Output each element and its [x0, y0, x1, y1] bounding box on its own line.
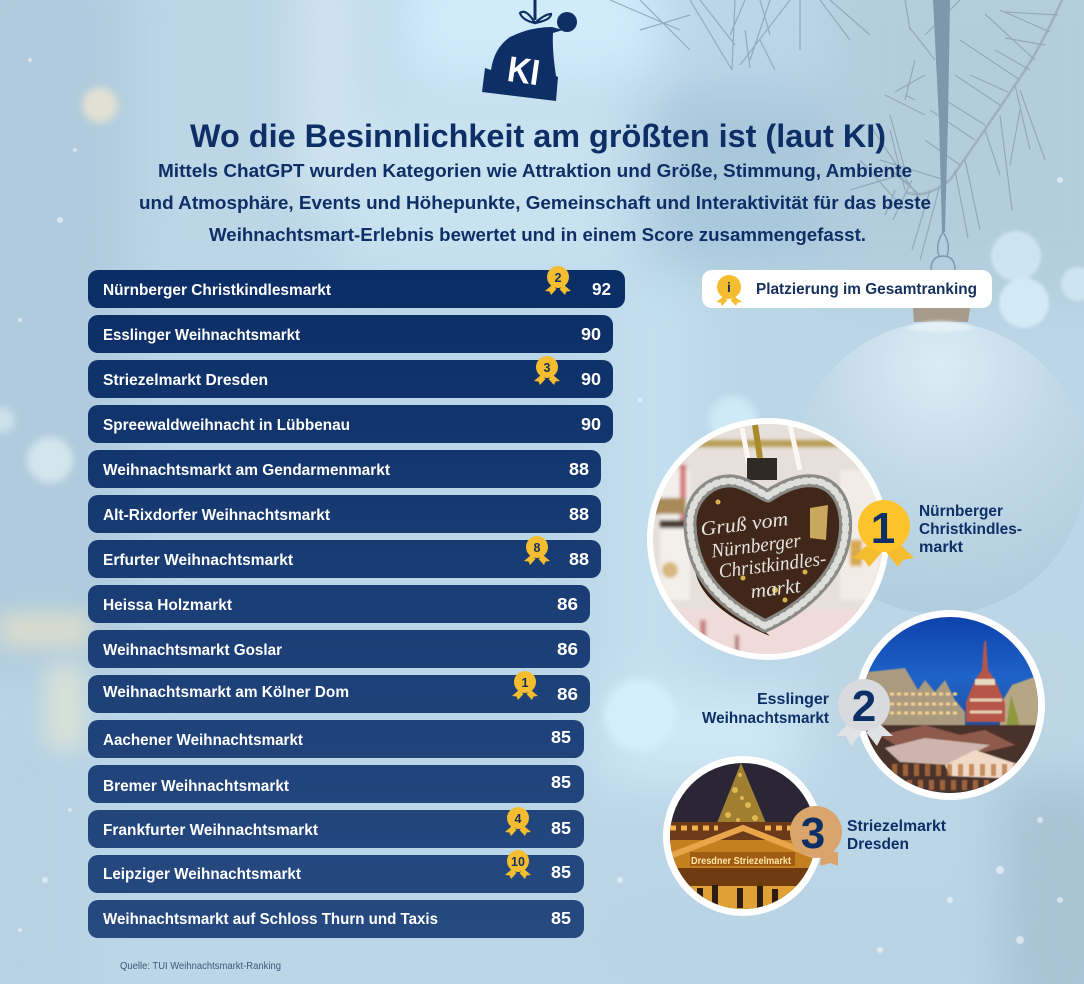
intro text: Weihnachtsmart-Erlebnis bewertet und in einem Score zusammengefasst.: [209, 225, 866, 245]
medal: overall rank 4: 4: [515, 812, 522, 826]
label: Nürnberger Christkindlesmarkt: markt: [919, 539, 964, 556]
label: Esslinger Weihnachtsmarkt: [702, 691, 830, 727]
bar: Weihnachtsmarkt Goslar 86: 86: [557, 639, 578, 659]
bar: Striezelmarkt Dresden 90: 90: [581, 369, 601, 389]
bar: Leipziger Weihnachtsmarkt 85: 85: [551, 862, 571, 882]
medal: overall rank 1: 1: [522, 676, 529, 690]
title: Wo die Besinnlichkeit am größten ist (laut KI): [190, 118, 886, 154]
bar: Weihnachtsmarkt am Gendarmenmarkt 88: Weihnachtsmarkt am Gendarmenmarkt: [103, 462, 391, 479]
medal: rank 2: 2: [852, 682, 876, 731]
bar: Weihnachtsmarkt am Kölner Dom 86: 86: [557, 684, 578, 704]
heart inscription: [702, 516, 826, 598]
bauble: [794, 308, 1084, 614]
icicle and ornament hook: [931, 0, 955, 270]
photo: Dresden Striezelmarkt: [663, 756, 824, 920]
bar: Alt-Rixdorfer Weihnachtsmarkt 88: [88, 495, 601, 533]
heart inscription: Gruß vom: [699, 508, 789, 541]
bar: Heissa Holzmarkt 86: [88, 585, 590, 623]
bar: Esslinger Weihnachtsmarkt 90: Esslinger Weihnachtsmarkt: [103, 327, 301, 344]
icon: KI hat: [482, 0, 577, 101]
legend: Platzierung im Gesamtranking: [756, 281, 977, 298]
legend: i: [727, 279, 731, 295]
bar: Alt-Rixdorfer Weihnachtsmarkt 88: 88: [569, 504, 589, 524]
photo: Esslingen market square: [855, 610, 1046, 805]
bar: Leipziger Weihnachtsmarkt 85: [88, 855, 584, 893]
bar: Weihnachtsmarkt am Gendarmenmarkt 88: [88, 450, 601, 488]
medal: rank 1: 1: [871, 504, 895, 553]
label: Striezelmarkt Dresden: Striezelmarkt: [847, 818, 947, 835]
pine branches: [610, 0, 1062, 260]
intro text: [139, 161, 931, 245]
bar: Frankfurter Weihnachtsmarkt 85: Frankfurter Weihnachtsmarkt: [103, 822, 319, 839]
heart inscription: markt: [749, 575, 802, 603]
bar: Striezelmarkt Dresden 90: Striezelmarkt Dresden: [103, 372, 268, 389]
medal: overall rank 2: [545, 266, 571, 295]
bar: Leipziger Weihnachtsmarkt 85: Leipziger Weihnachtsmarkt: [103, 866, 302, 883]
bar: Weihnachtsmarkt am Kölner Dom 86: [88, 675, 590, 713]
legend: [702, 270, 992, 308]
bar: Nürnberger Christkindlesmarkt 92: [88, 270, 625, 308]
bar: Weihnachtsmarkt auf Schloss Thurn und Taxis 85: [88, 900, 584, 938]
bar: Erfurter Weihnachtsmarkt 88: [88, 540, 601, 578]
bar: Nürnberger Christkindlesmarkt 92: Nürnberger Christkindlesmarkt: [103, 282, 332, 299]
bar: Aachener Weihnachtsmarkt 85: Aachener Weihnachtsmarkt: [103, 732, 304, 749]
bar: Bremer Weihnachtsmarkt 85: [88, 765, 584, 803]
market sign: Dresdner Striezelmarkt: [691, 856, 792, 867]
hat label: KI: [505, 48, 542, 93]
bar: Esslinger Weihnachtsmarkt 90: [88, 315, 613, 353]
bar: Heissa Holzmarkt 86: 86: [557, 594, 578, 614]
bar: Heissa Holzmarkt 86: Heissa Holzmarkt: [103, 597, 233, 614]
bar: Spreewaldweihnacht in Lübbenau 90: [88, 405, 613, 443]
medal: rank 2: [836, 679, 893, 746]
medal: overall rank 3: 3: [544, 361, 551, 375]
label: Nürnberger Christkindlesmarkt: [919, 503, 1022, 556]
bar: Weihnachtsmarkt auf Schloss Thurn und Taxis 85: Weihnachtsmarkt auf Schloss Thurn und Taxis: [103, 911, 438, 928]
bar: Weihnachtsmarkt auf Schloss Thurn und Taxis 85: 85: [551, 908, 571, 928]
medal: overall rank 8: [524, 536, 550, 565]
label: Nürnberger Christkindlesmarkt: Christkindles-: [919, 521, 1022, 538]
source note: Quelle: TUI Weihnachtsmarkt-Ranking: [120, 961, 281, 972]
bar: Bremer Weihnachtsmarkt 85: 85: [551, 772, 571, 792]
medal: overall rank 10: 10: [511, 855, 525, 869]
label: Nürnberger Christkindlesmarkt: Nürnberger: [919, 503, 1003, 520]
medal: rank 1: [853, 500, 914, 567]
intro text: und Atmosphäre, Events und Höhepunkte, Gemeinschaft und Interaktivität für das beste: [139, 193, 931, 213]
bar: Weihnachtsmarkt am Gendarmenmarkt 88: 88: [569, 459, 589, 479]
intro text: Mittels ChatGPT wurden Kategorien wie Attraktion und Größe, Stimmung, Ambiente: [158, 161, 912, 181]
bar: Weihnachtsmarkt am Kölner Dom 86: Weihnachtsmarkt am Kölner Dom: [103, 684, 349, 701]
label: Esslinger Weihnachtsmarkt: Esslinger: [757, 691, 829, 708]
label: Esslinger Weihnachtsmarkt: Weihnachtsmarkt: [702, 710, 830, 727]
label: Striezelmarkt Dresden: Dresden: [847, 836, 909, 853]
bar: Esslinger Weihnachtsmarkt 90: 90: [581, 324, 601, 344]
bar: Erfurter Weihnachtsmarkt 88: 88: [569, 549, 589, 569]
bar: Weihnachtsmarkt Goslar 86: Weihnachtsmarkt Goslar: [103, 642, 282, 659]
bar: Striezelmarkt Dresden 90: [88, 360, 613, 398]
medal: overall rank 1: [512, 671, 538, 700]
ranking bar chart: [88, 266, 625, 938]
bar: Alt-Rixdorfer Weihnachtsmarkt 88: Alt-Rixdorfer Weihnachtsmarkt: [103, 507, 331, 524]
bar: Nürnberger Christkindlesmarkt 92: 92: [592, 279, 611, 299]
medal: rank 3: 3: [801, 809, 825, 858]
bar: Spreewaldweihnacht in Lübbenau 90: 90: [581, 414, 601, 434]
medal: overall rank 10: [505, 850, 531, 879]
bar: Frankfurter Weihnachtsmarkt 85: [88, 810, 584, 848]
bar: Frankfurter Weihnachtsmarkt 85: 85: [551, 818, 571, 838]
bar: Spreewaldweihnacht in Lübbenau 90: Spreewaldweihnacht in Lübbenau: [103, 417, 350, 434]
medal: rank 3: [790, 806, 842, 866]
heart inscription: Nürnberger: [709, 530, 802, 563]
medal: overall rank 2: 2: [555, 271, 562, 285]
medal: overall rank 8: 8: [534, 541, 541, 555]
bar: Aachener Weihnachtsmarkt 85: [88, 720, 584, 758]
bar: Weihnachtsmarkt Goslar 86: [88, 630, 590, 668]
bar: Bremer Weihnachtsmarkt 85: Bremer Weihnachtsmarkt: [103, 778, 290, 795]
label: Striezelmarkt Dresden: [847, 818, 947, 853]
bar: Erfurter Weihnachtsmarkt 88: Erfurter Weihnachtsmarkt: [103, 552, 294, 569]
medal: overall rank 4: [505, 807, 531, 836]
medal: overall rank 3: [534, 356, 560, 385]
photo: Nürnberger Christkindlesmarkt gingerbread heart: [640, 418, 900, 665]
bar: Aachener Weihnachtsmarkt 85: 85: [551, 727, 571, 747]
heart inscription: Christkindles-: [718, 548, 827, 583]
